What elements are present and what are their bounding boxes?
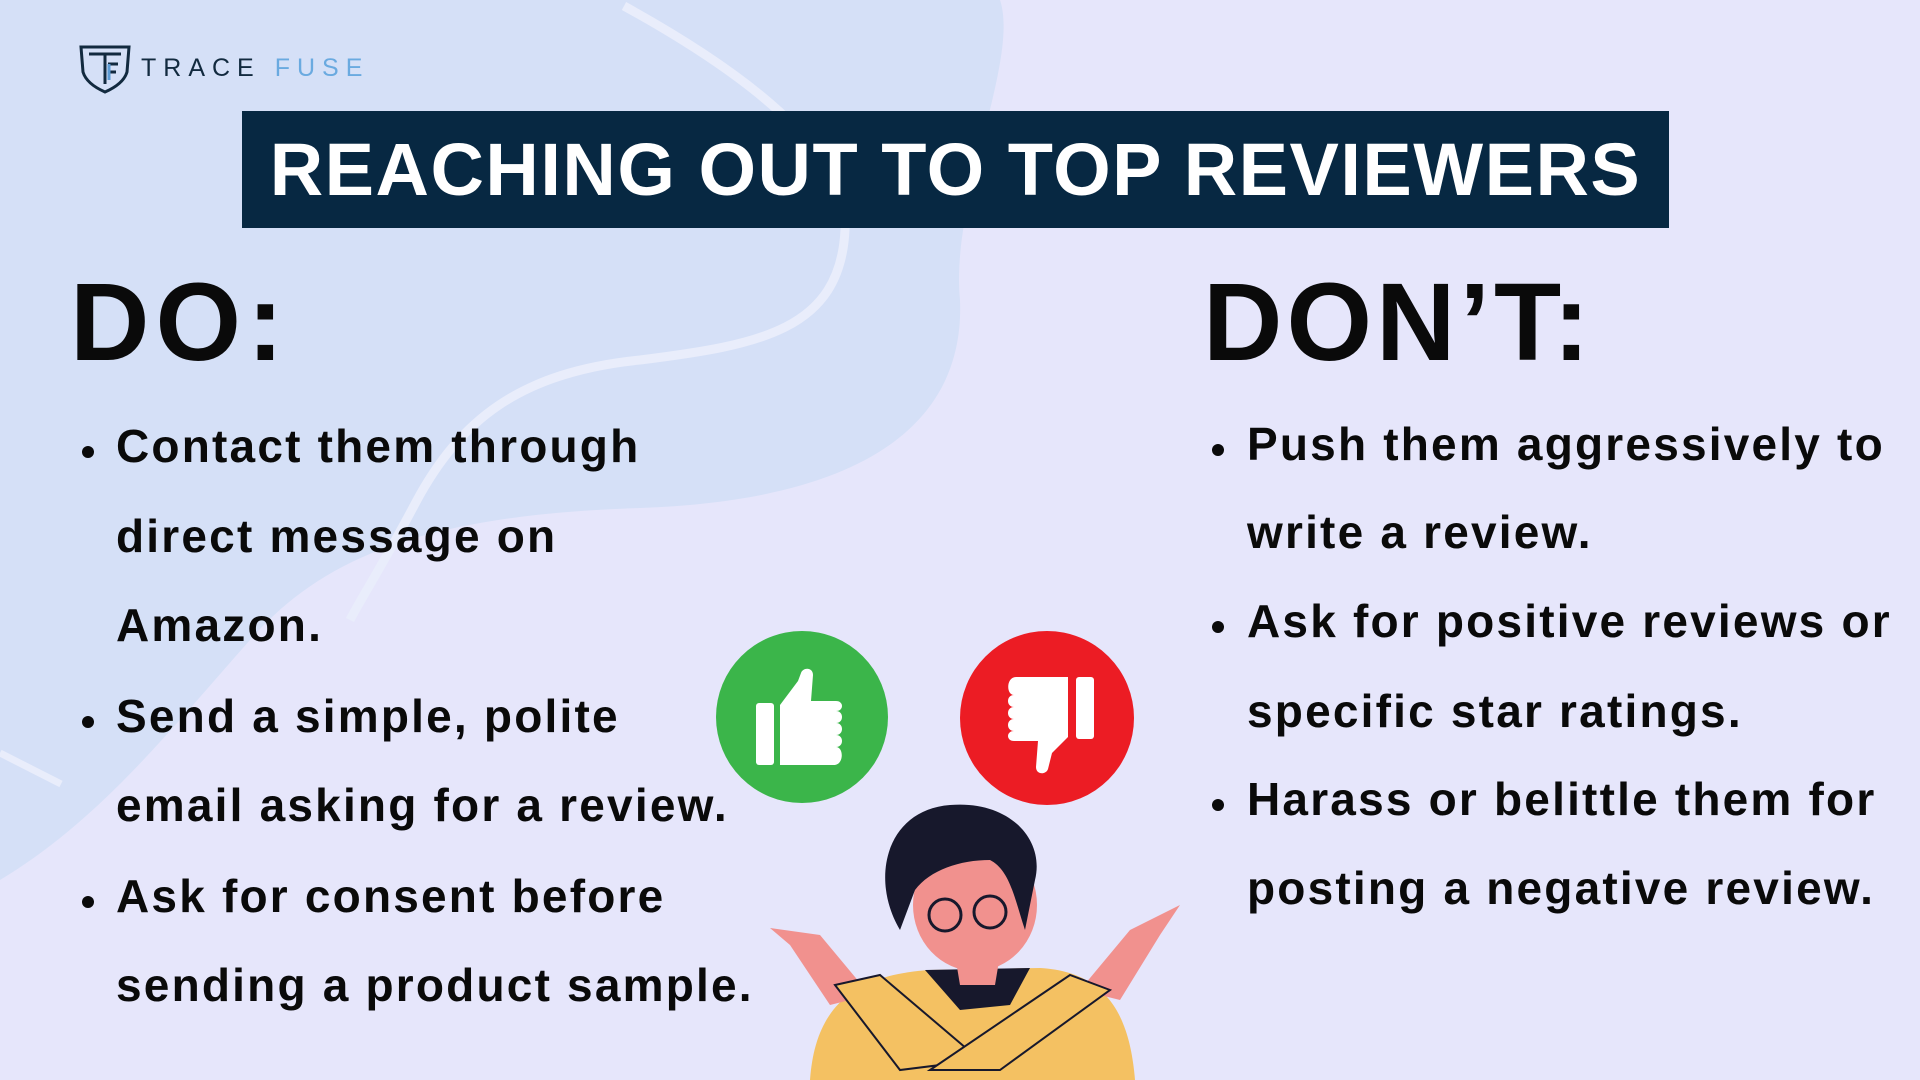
heading: DON'T: DON’T: — [1203, 261, 1594, 384]
title — [242, 111, 1669, 228]
list: don't: Ask for positive reviews or — [1247, 595, 1892, 647]
heading: DO: DO: — [70, 261, 290, 384]
logo — [79, 46, 369, 94]
list: don't: Harass or belittle them for — [1247, 773, 1876, 825]
icon: thumbs down — [960, 631, 1134, 805]
list: do: direct message on — [116, 510, 557, 562]
list: don't — [1212, 418, 1892, 914]
list: do: sending a product sample. — [116, 959, 754, 1011]
list: do: Contact them through — [116, 420, 640, 472]
title: REACHING OUT TO TOP REVIEWERS — [270, 128, 1641, 211]
list: don't: Push them aggressively to — [1247, 418, 1885, 470]
list: don't: specific star ratings. — [1247, 685, 1743, 737]
list: do: email asking for a review. — [116, 779, 729, 831]
list: do — [82, 420, 754, 1011]
list: do: Ask for consent before — [116, 870, 665, 922]
icon: thumbs up — [716, 631, 888, 803]
logo text: TRACE FUSE — [141, 54, 369, 82]
illustration: person crossing arms — [770, 804, 1180, 1080]
list: do: Send a simple, polite — [116, 690, 620, 742]
list: don't: posting a negative review. — [1247, 862, 1875, 914]
icon: shield — [79, 46, 131, 94]
list: do: Amazon. — [116, 599, 323, 651]
list: don't: write a review. — [1247, 506, 1593, 558]
